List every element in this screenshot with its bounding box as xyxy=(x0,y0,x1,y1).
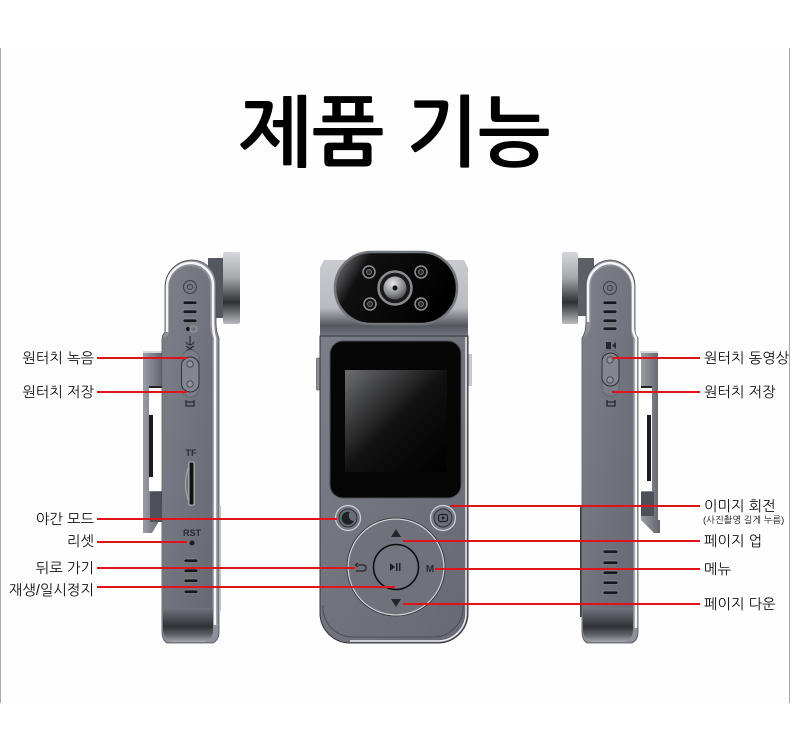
right edge highlight xyxy=(350,337,466,641)
indicator xyxy=(186,326,197,332)
icon: video xyxy=(606,342,616,349)
label: one-touch video: 원터치 동영상 xyxy=(704,351,790,367)
camera rotate button xyxy=(430,506,456,530)
device: front view xyxy=(316,252,472,643)
device: right side view xyxy=(562,252,660,643)
icon: microphone xyxy=(186,336,194,351)
lower body xyxy=(320,336,468,643)
label: one-touch recording: 원터치 녹음 xyxy=(22,351,94,367)
label: back: 뒤로 가기 xyxy=(36,561,94,577)
LED top left xyxy=(363,266,375,278)
label: play pause: 재생/일시정지 xyxy=(9,582,94,599)
callout lines xyxy=(97,357,700,605)
center play button xyxy=(374,544,418,590)
belt clip xyxy=(143,351,162,533)
rocker switch xyxy=(602,350,619,396)
label: image rotate: 이미지 회전 xyxy=(704,499,776,515)
title: 제품 기능 xyxy=(240,90,550,176)
LED bottom left xyxy=(364,298,376,310)
RST label: RST xyxy=(183,528,202,538)
label: long press note: (사진촬영 길게 누름) xyxy=(703,515,784,525)
speaker slots upper xyxy=(603,301,617,330)
screen bezel xyxy=(330,341,461,498)
icon: camera save xyxy=(607,400,615,406)
d-pad ring xyxy=(348,519,444,615)
night mode button xyxy=(336,506,360,530)
label: night mode: 야간 모드 xyxy=(36,512,94,528)
TF label: TF xyxy=(186,448,197,458)
icon: power button xyxy=(604,282,616,294)
back icon xyxy=(356,563,366,571)
lens xyxy=(378,272,412,304)
side panel xyxy=(583,266,633,612)
camera barrel xyxy=(562,252,594,324)
TF card slot xyxy=(186,462,194,505)
label: reset: 리셋 xyxy=(67,534,94,550)
left labels xyxy=(9,351,94,599)
label: one-touch save: 원터치 저장 xyxy=(22,385,94,401)
display xyxy=(345,370,447,472)
menu M: M xyxy=(426,564,434,575)
side buttons xyxy=(316,354,472,390)
label: page down: 페이지 다운 xyxy=(704,597,776,613)
bottom edge xyxy=(163,608,213,642)
camera module xyxy=(335,252,457,324)
side panel xyxy=(163,266,212,612)
label: page up: 페이지 업 xyxy=(704,534,762,550)
thin edge line xyxy=(220,506,221,611)
LED top right xyxy=(415,266,427,278)
up arrow xyxy=(391,529,401,537)
inner bottom edge xyxy=(323,605,463,637)
bottom edge xyxy=(583,608,633,642)
label: menu: 메뉴 xyxy=(704,562,732,578)
speaker slots lower xyxy=(603,550,618,594)
rocker switch xyxy=(182,350,199,397)
thin edge line xyxy=(580,507,582,617)
icon: save xyxy=(186,400,194,406)
label: one-touch save: 원터치 저장 xyxy=(704,385,776,401)
device: left side view xyxy=(143,252,240,643)
down arrow xyxy=(391,599,401,607)
speaker slots lower xyxy=(184,559,198,594)
belt clip xyxy=(640,351,660,533)
icon: power button xyxy=(184,280,196,294)
d-pad ring shadow xyxy=(347,518,445,616)
reset hole xyxy=(190,540,194,546)
right labels xyxy=(703,351,790,613)
top section xyxy=(320,260,468,337)
body shell xyxy=(162,260,219,643)
shell highlight xyxy=(588,263,636,628)
shell highlight xyxy=(167,263,215,625)
LED bottom right xyxy=(415,298,427,310)
body shell xyxy=(582,260,638,643)
speaker slots upper xyxy=(183,301,197,322)
camera barrel xyxy=(208,252,240,324)
